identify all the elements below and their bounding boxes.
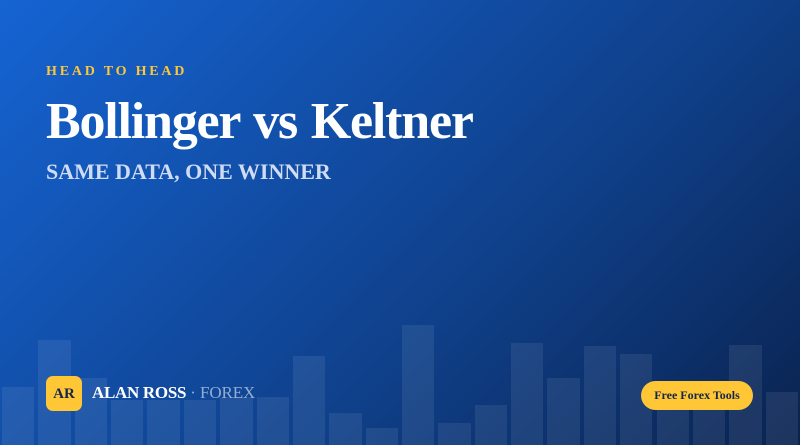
eyebrow label: HEAD TO HEAD: [46, 64, 187, 79]
call to action button: Free Forex Tools: [654, 388, 740, 402]
brand name: ALAN ROSS · FOREX: [92, 383, 255, 402]
subtitle: SAME DATA, ONE WINNER: [46, 159, 331, 184]
call to action button: [641, 381, 753, 410]
title: Bollinger vs Keltner: [46, 93, 473, 150]
brand logo badge: AR: [53, 386, 75, 402]
brand logo badge: [46, 376, 82, 411]
